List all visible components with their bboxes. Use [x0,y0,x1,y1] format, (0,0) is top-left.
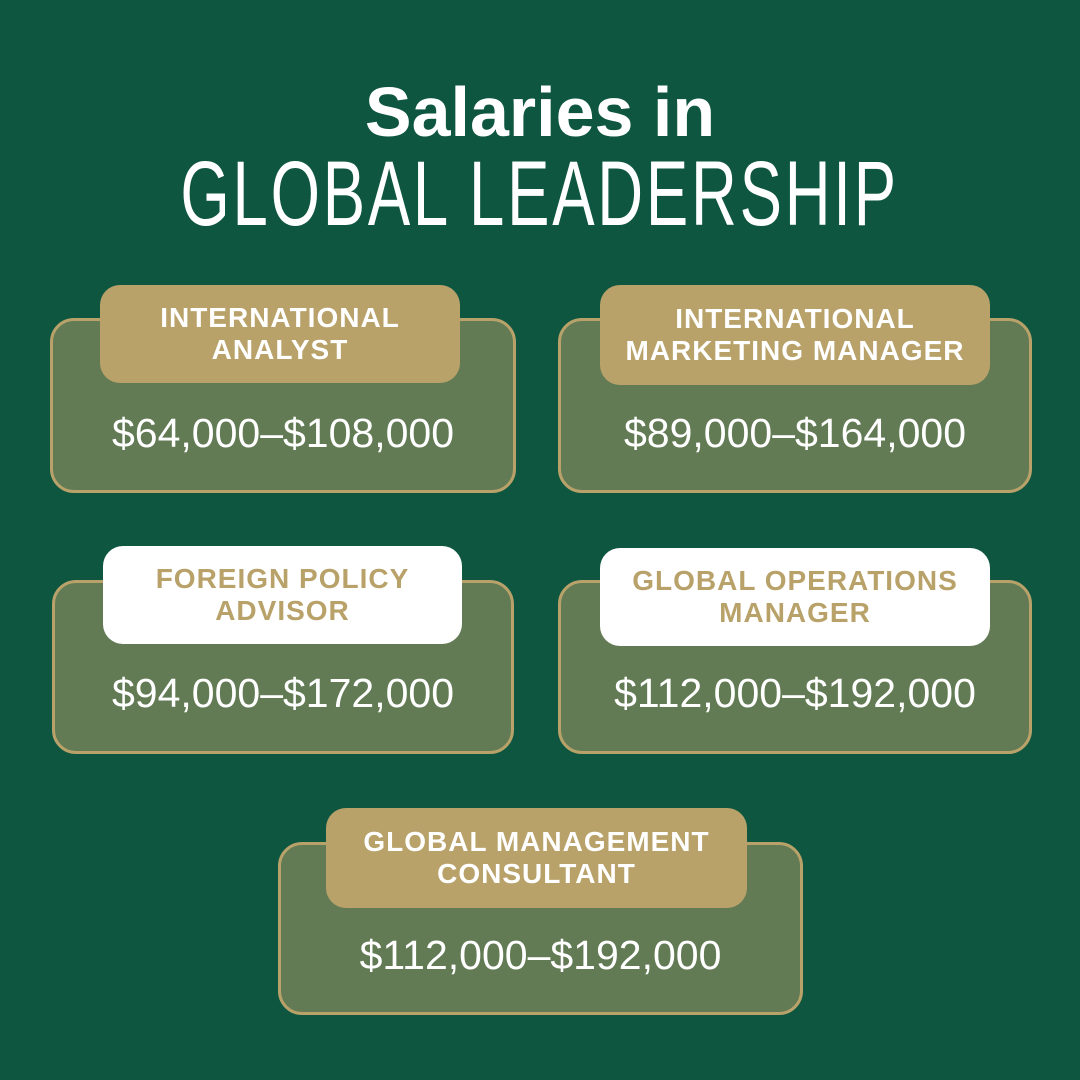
salary: global operations manager: $112,000–$192,000 [614,670,976,716]
title line 2: GLOBAL LEADERSHIP [181,143,899,245]
tab: global operations manager: MANAGER [719,597,871,628]
salary: foreign policy advisor: $94,000–$172,000 [112,670,454,716]
tab: global management consultant: GLOBAL MANAGEMENT [363,826,710,857]
tab: global management consultant: CONSULTANT [437,858,636,889]
salary: international analyst: $64,000–$108,000 [112,410,454,456]
tab: marketing manager [600,285,990,385]
tab: global management consultant [326,808,747,908]
tab: foreign policy advisor [103,546,462,644]
panel: foreign policy advisor [52,580,514,754]
tab: marketing manager: INTERNATIONAL [675,303,915,334]
panel: global management consultant [278,842,803,1015]
panel: international analyst [50,318,516,493]
salary: global management consultant: $112,000–$192,000 [360,932,721,978]
salary: marketing manager: $89,000–$164,000 [624,410,966,456]
panel: marketing manager [558,318,1032,493]
tab: global operations manager: GLOBAL OPERATIONS [632,565,958,596]
tab: marketing manager: MARKETING MANAGER [626,335,964,366]
tab: foreign policy advisor: FOREIGN POLICY [156,563,409,594]
tab: international analyst: ANALYST [212,334,348,365]
panel: global operations manager [558,580,1032,754]
title line 1: Salaries in [365,73,715,151]
tab: international analyst [100,285,460,383]
tab: international analyst: INTERNATIONAL [160,302,400,333]
tab: global operations manager [600,548,990,646]
tab: foreign policy advisor: ADVISOR [215,595,350,626]
